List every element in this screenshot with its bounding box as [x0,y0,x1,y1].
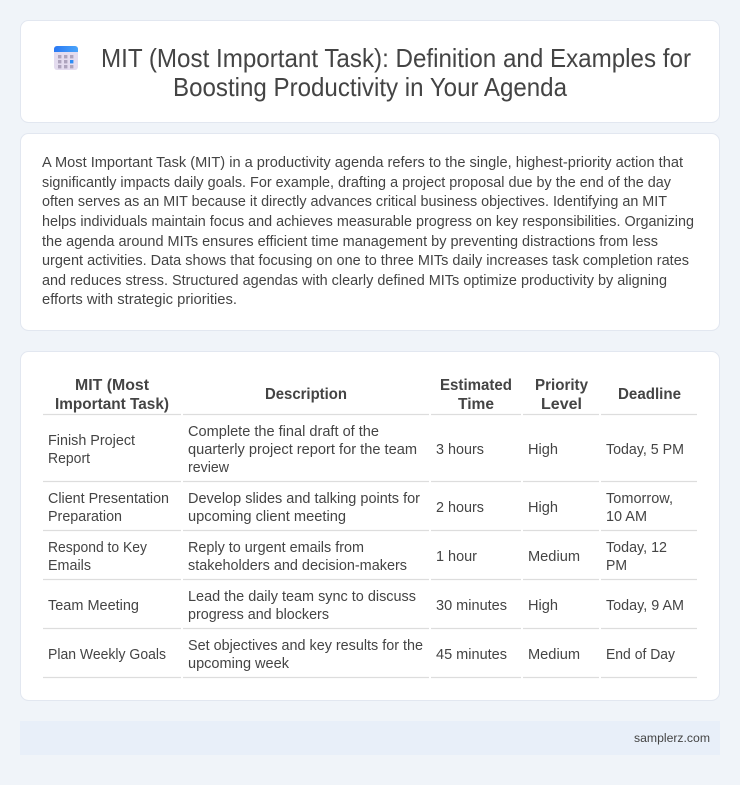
table row: Finish Project Report: Complete the final draft of the [188,424,379,440]
table row: Respond to Key Emails: Today, 12 [606,540,667,556]
footer source text: samplerz.com [634,731,710,745]
table row: Client Presentation Preparation: 10 AM [606,509,647,525]
table row: Team Meeting: 30 minutes [436,598,507,614]
text block: definition paragraph: urgent activities. Data shows that focusing on one to three MITs daily increases task completion rates [42,253,689,269]
table row: Finish Project Report: High [528,442,558,458]
panel: title header [20,20,720,122]
table header row: Deadline [618,386,681,403]
footer bar [20,721,720,755]
table row: Plan Weekly Goals: Plan Weekly Goals [48,647,166,663]
table row: Plan Weekly Goals [48,638,676,672]
table row: Finish Project Report: Report [48,451,90,467]
table row: Client Presentation Preparation: Preparation [48,509,122,525]
title [101,45,691,102]
table header row: Priority [535,377,588,394]
table row: Respond to Key Emails: PM [606,558,627,574]
table row: Client Presentation Preparation: High [528,500,558,516]
panel: MIT table [20,352,720,700]
text block: definition paragraph: often serves as an MIT because it directly advances critical business objectives. Identifying an MIT [42,194,667,210]
table row: Finish Project Report: quarterly project report for the team [188,442,417,458]
table row: Finish Project Report: review [188,460,229,476]
table row: Respond to Key Emails: Respond to Key [48,540,148,556]
table row: Respond to Key Emails: Reply to urgent emails from [188,540,364,556]
table row: Team Meeting: Team Meeting [48,598,139,614]
table row: Client Presentation Preparation: Tomorrow, [606,491,673,507]
table row: Respond to Key Emails: Emails [48,558,91,574]
table row: Finish Project Report: Finish Project [48,433,135,449]
table row: Plan Weekly Goals: 45 minutes [436,647,507,663]
table row: Respond to Key Emails: stakeholders and decision-makers [188,558,407,574]
text block: definition paragraph: the agenda around MITs ensures efficient time management by preventing distractions from less [42,234,658,250]
table header row [55,377,681,413]
text block: definition paragraph [42,155,694,308]
table row: Team Meeting: Today, 9 AM [606,598,684,614]
table row: Plan Weekly Goals: End of Day [606,647,676,663]
table row: Respond to Key Emails: Medium [528,549,580,565]
table header row: Important Task) [55,396,169,413]
table header row: Estimated [440,377,512,394]
table row: Team Meeting: High [528,598,558,614]
table row: Finish Project Report [48,424,684,476]
table row: Team Meeting: Lead the daily team sync to discuss [188,589,416,605]
table header row: Description [265,386,347,403]
table header row: Time [458,396,494,413]
table header row: Level [541,396,582,413]
text block: definition paragraph: significantly impacts daily goals. For example, drafting a project proposal due by the end of the day [42,175,672,191]
text block: definition paragraph: and reduces stress. Structured agendas with clearly defined MITs optimize productivity by aligning [42,273,667,289]
table row: Finish Project Report: 3 hours [436,442,484,458]
table row: Finish Project Report: Today, 5 PM [606,442,684,458]
panel: definition text [20,134,720,330]
table row: Team Meeting: progress and blockers [188,607,329,623]
table row: Client Presentation Preparation [48,491,673,525]
table row: Client Presentation Preparation: Client Presentation [48,491,169,507]
text block: definition paragraph: efforts with strategic priorities. [42,292,237,308]
table row: Plan Weekly Goals: upcoming week [188,656,290,672]
table header row: MIT (Most [75,377,150,394]
text block: definition paragraph: A Most Important Task (MIT) in a productivity agenda refers to the single, highest-priority action that [42,155,683,171]
table row: Client Presentation Preparation: upcoming client meeting [188,509,346,525]
table row: Client Presentation Preparation: Develop slides and talking points for [188,491,420,507]
table row: Respond to Key Emails [48,540,667,574]
table row: Respond to Key Emails: 1 hour [436,549,477,565]
title: MIT (Most Important Task): Definition and Examples for [101,45,691,73]
title: Boosting Productivity in Your Agenda [173,74,568,102]
text block: definition paragraph: helps individuals maintain focus and achieves measurable progress on key responsibilities. Organizing [42,214,694,230]
table row: Client Presentation Preparation: 2 hours [436,500,484,516]
table row: Plan Weekly Goals: Medium [528,647,580,663]
icon: calendar [54,46,78,70]
table row: Team Meeting [48,589,684,623]
table row: Plan Weekly Goals: Set objectives and key results for the [188,638,423,654]
